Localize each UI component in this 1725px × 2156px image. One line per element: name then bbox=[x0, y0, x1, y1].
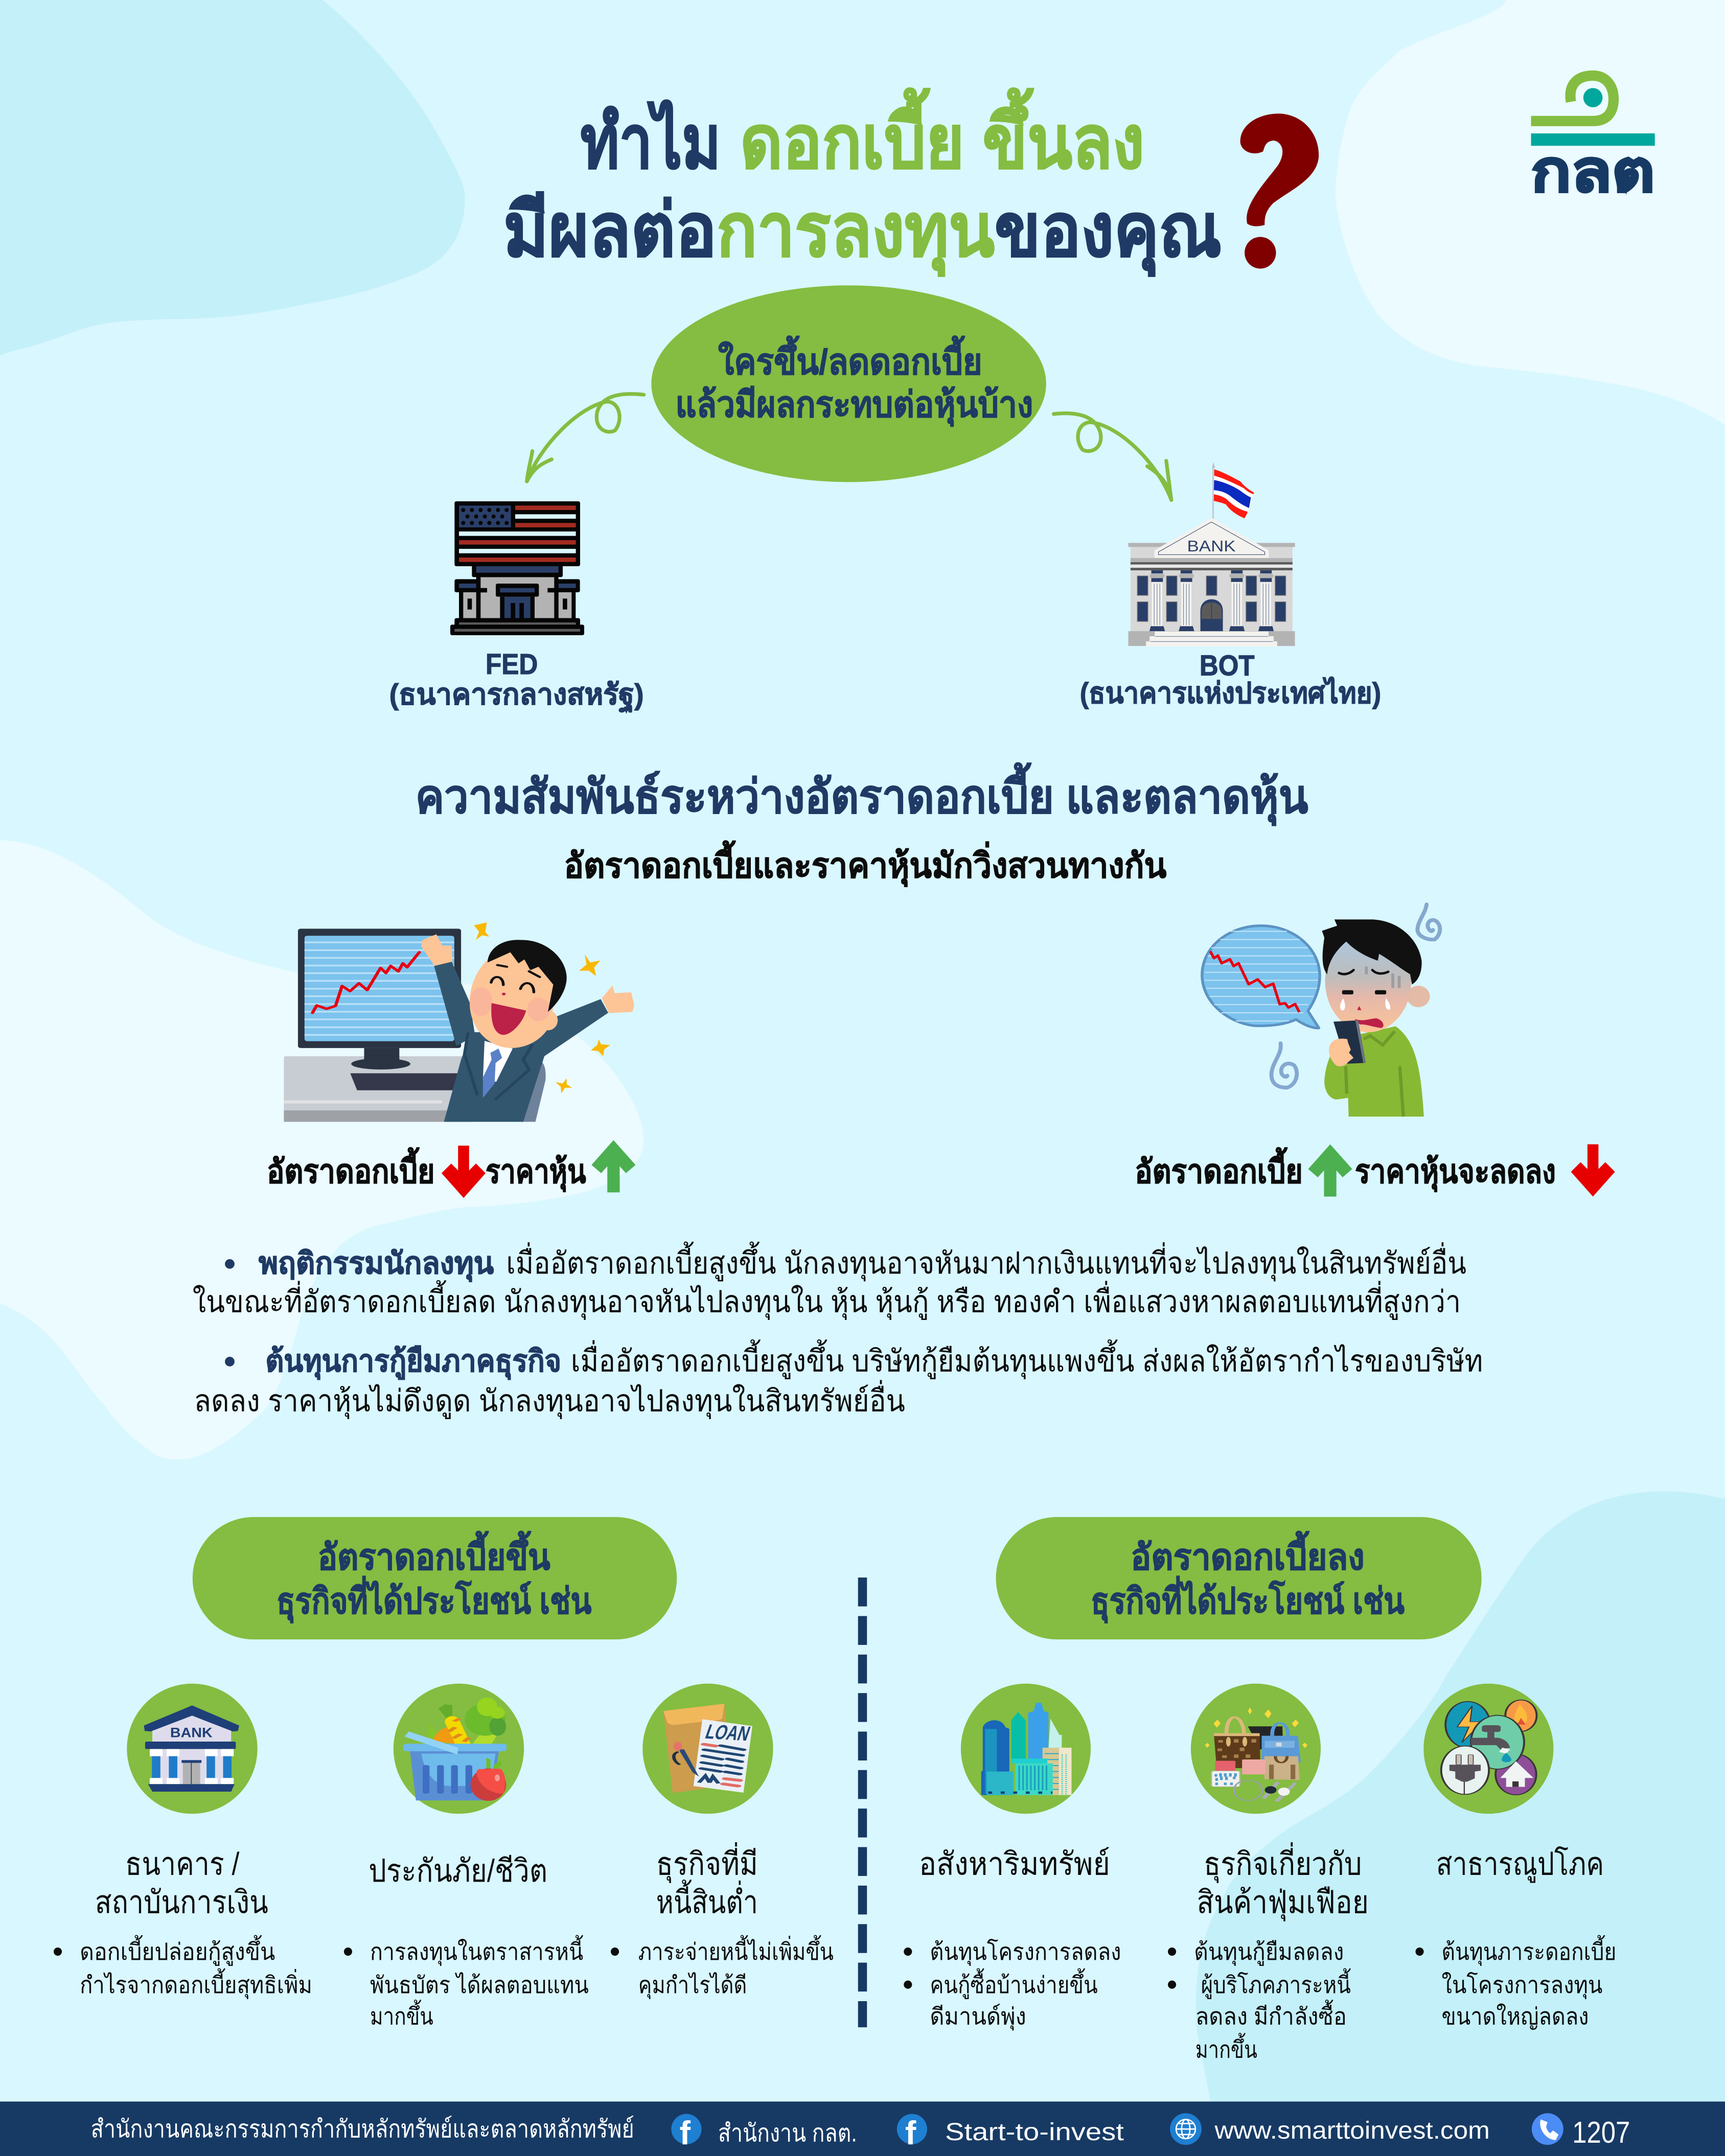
column: insurance: การลงทุนในตราสารหนี้ bbox=[370, 1935, 583, 1966]
column: utilities: สาธารณูปโภค bbox=[1436, 1846, 1604, 1883]
column: banks: ธนาคาร / bbox=[125, 1846, 240, 1882]
column: utilities: ในโครงการลงทุน bbox=[1442, 1972, 1602, 2000]
footer: www.smarttoinvest.com bbox=[1214, 2117, 1490, 2144]
icon: FED building bbox=[450, 501, 584, 635]
arrow: to BOT bbox=[1054, 413, 1171, 500]
background blob: middle left bbox=[0, 840, 643, 1459]
callout oval: แล้วมีผลกระทบต่อหุ้นบ้าง bbox=[675, 384, 1033, 427]
column: real estate: ดีมานด์พุ่ง bbox=[930, 2004, 1026, 2031]
illustration: worried investor bbox=[1202, 905, 1440, 1117]
icon: insurance basket bbox=[394, 1684, 524, 1814]
label: rate up, stocks down: อัตราดอกเบี้ย bbox=[1135, 1147, 1303, 1190]
subheading: อัตราดอกเบี้ยและราคาหุ้นมักวิ่งสวนทางกัน bbox=[564, 840, 1166, 887]
label: rate down, stocks up: ราคาหุ้น bbox=[486, 1153, 586, 1193]
column: luxury goods: ลดลง มีกำลังซื้อ bbox=[1195, 2000, 1347, 2030]
column: low debt firms bbox=[611, 1842, 834, 2000]
column: luxury goods: ต้นทุนกู้ยืมลดลง bbox=[1194, 1939, 1344, 1966]
pill: rates down: อัตราดอกเบี้ยลง bbox=[1131, 1531, 1365, 1577]
column: real estate: คนกู้ซื้อบ้านง่ายขึ้น bbox=[930, 1968, 1098, 1999]
label: FED: (ธนาคารกลางสหรัฐ) bbox=[389, 678, 644, 713]
column: insurance: พันธบัตร ได้ผลตอบแทน bbox=[370, 1972, 589, 1998]
column: luxury goods: ธุรกิจเกี่ยวกับ bbox=[1204, 1842, 1362, 1883]
background blob: top left bbox=[0, 0, 465, 356]
text block: investor behaviour bbox=[193, 1241, 1466, 1320]
label: rate down, stocks up: อัตราดอกเบี้ย bbox=[267, 1147, 434, 1190]
footer: Start-to-invest bbox=[945, 2118, 1124, 2146]
column: real estate bbox=[904, 1846, 1121, 2031]
column: insurance bbox=[344, 1853, 589, 2030]
title: ทำไม bbox=[581, 100, 721, 183]
callout oval bbox=[651, 285, 1046, 482]
callout oval: ใครขึ้น/ลดดอกเบี้ย bbox=[718, 335, 982, 382]
label: BOT bbox=[1080, 649, 1381, 709]
icon: facebook bbox=[897, 2114, 927, 2151]
label: rate up, stocks down bbox=[1135, 1144, 1615, 1196]
column: real estate: อสังหาริมทรัพย์ bbox=[919, 1846, 1110, 1882]
footer: สำนักงาน กลต. bbox=[718, 2119, 857, 2147]
text block: borrowing costs bbox=[194, 1339, 1483, 1419]
column: banks: สถาบันการเงิน bbox=[95, 1885, 268, 1920]
icon: loan document bbox=[642, 1684, 773, 1814]
pill: rates down bbox=[996, 1517, 1482, 1639]
text block: borrowing costs: ลดลง ราคาหุ้นไม่ดึงดูด นักลงทุนอาจไปลงทุนในสินทรัพย์อื่น bbox=[194, 1380, 905, 1419]
title: ดอกเบี้ย ขึ้นลง bbox=[740, 87, 1144, 183]
background blob: bottom right bbox=[1196, 1491, 1725, 2101]
pill: rates up: อัตราดอกเบี้ยขึ้น bbox=[318, 1531, 550, 1577]
label: BOT: (ธนาคารแห่งประเทศไทย) bbox=[1080, 676, 1381, 709]
pill: rates up bbox=[193, 1517, 677, 1639]
icon: Thai flag and bank: BANK bbox=[1187, 538, 1236, 555]
column: low debt firms: หนี้สินต่ำ bbox=[656, 1880, 758, 1920]
label: rate down, stocks up bbox=[267, 1140, 635, 1198]
label: FED bbox=[389, 648, 644, 713]
icon: bank circle: BANK bbox=[170, 1725, 213, 1740]
column: utilities: ต้นทุนภาระดอกเบี้ย bbox=[1442, 1935, 1616, 1966]
title: มีผลต่อ bbox=[503, 189, 717, 272]
column: insurance: มากขึ้น bbox=[370, 2000, 433, 2030]
pill: rates down: ธุรกิจที่ได้ประโยชน์ เช่น bbox=[1091, 1575, 1405, 1624]
pill: rates up: ธุรกิจที่ได้ประโยชน์ เช่น bbox=[277, 1575, 591, 1624]
column: insurance: ประกันภัย/ชีวิต bbox=[369, 1853, 547, 1889]
title: การลงทุน bbox=[717, 189, 995, 277]
column: low debt firms: ภาระจ่ายหนี้ไม่เพิ่มขึ้น bbox=[638, 1935, 834, 1965]
background blob: top right bbox=[1336, 0, 1725, 425]
logo bbox=[1531, 76, 1655, 203]
icon: luxury goods bbox=[1191, 1684, 1321, 1814]
arrow: to FED bbox=[527, 394, 644, 481]
text block: investor behaviour: ในขณะที่อัตราดอกเบี้ยลด นักลงทุนอาจหันไปลงทุนใน หุ้น หุ้นกู้ หรือ ทองคำ เพื่อแสวงหาผลตอบแทนที่สูงกว่า bbox=[193, 1280, 1461, 1320]
column: luxury goods: ผู้บริโภคภาระหนี้ bbox=[1201, 1968, 1351, 1999]
icon: facebook: f bbox=[680, 2115, 691, 2151]
text block: borrowing costs: ต้นทุนการกู้ยืมภาคธุรกิจ bbox=[265, 1343, 561, 1380]
heading: relation: ความสัมพันธ์ระหว่างอัตราดอกเบี้ย และตลาดหุ้น bbox=[416, 762, 1308, 826]
icon: utilities bbox=[1423, 1684, 1553, 1814]
icon: facebook: f bbox=[905, 2115, 916, 2151]
icon: bank circle bbox=[127, 1684, 258, 1814]
icon: globe bbox=[1170, 2113, 1202, 2145]
title: ของคุณ bbox=[995, 189, 1222, 277]
footer: สำนักงานคณะกรรมการกำกับหลักทรัพย์และตลาดหลักทรัพย์ bbox=[91, 2115, 634, 2143]
text block: investor behaviour: เมื่ออัตราดอกเบี้ยสูงขึ้น นักลงทุนอาจหันมาฝากเงินแทนที่จะไปลงทุนในสินทรัพย์อื่น bbox=[506, 1241, 1466, 1282]
label: FED: FED bbox=[486, 648, 538, 680]
label: rate up, stocks down: ราคาหุ้นจะลดลง bbox=[1355, 1153, 1556, 1193]
column: low debt firms: คุมกำไรได้ดี bbox=[638, 1972, 747, 2000]
column: banks bbox=[54, 1846, 312, 2000]
icon: phone bbox=[1532, 2113, 1563, 2145]
label: BOT: BOT bbox=[1200, 649, 1255, 681]
text block: borrowing costs: เมื่ออัตราดอกเบี้ยสูงขึ้น บริษัทกู้ยืมต้นทุนแพงขึ้น ส่งผลให้อัตรากำไรของบริษัท bbox=[571, 1339, 1483, 1379]
footer: 1207 bbox=[1572, 2115, 1630, 2149]
icon: real estate bbox=[961, 1684, 1091, 1814]
title bbox=[503, 87, 1222, 277]
column: luxury goods: มากขึ้น bbox=[1195, 2032, 1257, 2062]
column: luxury goods: สินค้าฟุ่มเฟือย bbox=[1197, 1885, 1369, 1921]
column: utilities bbox=[1415, 1846, 1616, 2030]
icon: Thai flag and bank bbox=[1129, 462, 1295, 646]
column: real estate: ต้นทุนโครงการลดลง bbox=[930, 1938, 1121, 1966]
icon: facebook bbox=[671, 2114, 702, 2151]
column: banks: ดอกเบี้ยปล่อยกู้สูงขึ้น bbox=[80, 1935, 275, 1966]
column: luxury goods bbox=[1168, 1842, 1369, 2062]
column: low debt firms: ธุรกิจที่มี bbox=[656, 1842, 758, 1883]
footer bbox=[0, 2101, 1725, 2156]
column: banks: กำไรจากดอกเบี้ยสุทธิเพิ่ม bbox=[80, 1968, 312, 2000]
illustration: happy investor bbox=[284, 922, 634, 1122]
text: LOAN bbox=[702, 1720, 753, 1745]
logo: กลต bbox=[1531, 139, 1655, 203]
column: utilities: ขนาดใหญ่ลดลง bbox=[1442, 2003, 1589, 2030]
text block: investor behaviour: พฤติกรรมนักลงทุน bbox=[259, 1246, 494, 1282]
icon: question mark bbox=[1240, 113, 1319, 269]
